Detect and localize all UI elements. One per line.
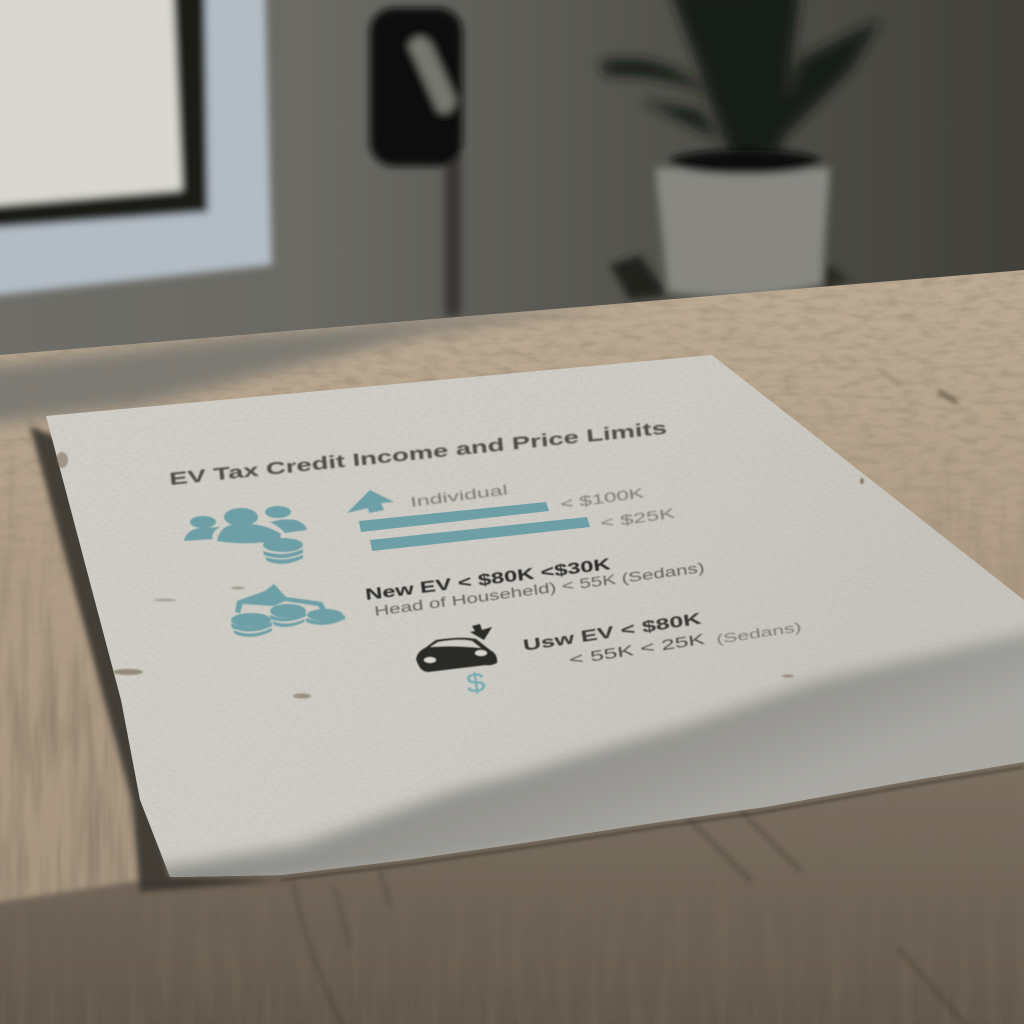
shaded fold of the sheet [150, 630, 1024, 900]
potted plant [600, 0, 880, 300]
title: EV Tax Credit Income and Price Limits [168, 418, 668, 489]
label: under 100K: < $100K [559, 484, 646, 512]
icon: car [416, 638, 497, 672]
wood grain streaks [293, 370, 970, 1024]
wooden table [0, 260, 1024, 1024]
text: New EV limits: New EV < $80K <$30K [364, 556, 613, 604]
EV charger on wall [370, 8, 462, 316]
text: sedans note: (Sedans) [715, 620, 802, 647]
background wall [0, 0, 1024, 360]
paper specks [56, 452, 864, 698]
icon: coin stacks with branching arrow [231, 584, 345, 637]
label: under 25K: < $25K [599, 505, 677, 531]
icon: up arrow [347, 490, 394, 513]
paper sheet [40, 350, 1024, 900]
bar: individual limit [359, 502, 549, 532]
window [0, 0, 272, 296]
label: Individual: Individual [409, 482, 509, 510]
text: head of household: Head of Househeld) < 55K (Sedans) [373, 559, 705, 619]
icon: group of people with coins [184, 506, 307, 564]
bar: second limit [370, 517, 590, 551]
paper contact shadow along front edge [281, 767, 1024, 880]
grey back edge of the table in shade [0, 300, 640, 425]
icon: dollar sign: $ [464, 667, 487, 699]
text: used EV limit: Usw EV < $80K [522, 610, 704, 655]
table shade at the front [0, 755, 1024, 1024]
paper shadow on table [30, 426, 285, 892]
text: used EV income limits: < 55K < 25K [568, 631, 706, 669]
icon: down arrow [470, 624, 492, 640]
